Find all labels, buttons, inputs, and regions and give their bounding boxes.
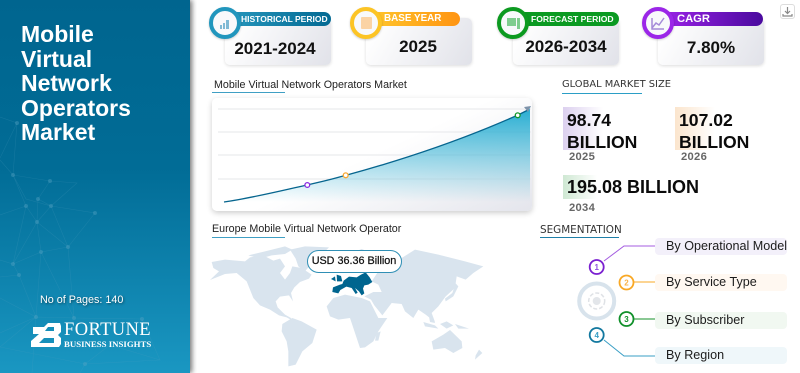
segment: subscriber — [655, 312, 787, 329]
badge 4: 4 — [594, 331, 599, 340]
sidebar title: Market — [21, 119, 95, 145]
callout: USD 36.36 Billion — [306, 250, 402, 273]
forecast icon — [497, 7, 529, 39]
sidebar title: Virtual — [21, 46, 92, 72]
value: 98.74 — [567, 110, 611, 130]
tint — [563, 175, 597, 199]
row background — [655, 312, 787, 329]
Greenland — [290, 246, 329, 271]
base year card — [366, 18, 472, 65]
badge 2: 2 — [624, 278, 629, 288]
row label: By Subscriber — [666, 313, 744, 327]
North America — [210, 255, 312, 321]
heading: Europe map: Europe Mobile Virtual Network Operator — [212, 223, 401, 235]
segmentation diagram — [577, 246, 655, 356]
stat: forecast period — [496, 7, 620, 67]
Europe highlight — [331, 272, 372, 295]
badge 3: 3 — [624, 315, 629, 324]
stat: CAGR — [641, 7, 765, 67]
value: BILLION — [679, 132, 749, 152]
segment: operational model — [655, 238, 787, 255]
base year value: 2025 — [399, 37, 437, 56]
forecast pill: FORECAST PERIOD — [531, 14, 614, 24]
marker 2025 — [305, 183, 310, 187]
heading: market chart: Mobile Virtual Network Operators Market — [214, 79, 407, 91]
base year icon — [350, 7, 382, 39]
forecast value: 2026-2034 — [525, 37, 607, 56]
stat: historical period — [208, 7, 332, 67]
Iceland — [320, 268, 328, 272]
value — [567, 110, 637, 152]
year: 2025 — [569, 151, 595, 163]
network pattern — [0, 117, 160, 373]
CAGR card — [658, 18, 764, 65]
Arctic islands — [248, 246, 292, 259]
value: BILLION — [567, 132, 637, 152]
segment: service type — [655, 274, 787, 291]
row background — [655, 347, 787, 364]
panel: market growth chart — [212, 98, 532, 211]
connectors — [604, 246, 655, 356]
center hub icon — [579, 284, 614, 318]
tint — [563, 107, 603, 150]
marker 2026 — [343, 173, 348, 178]
heading: segmentation: SEGMENTATION — [540, 224, 622, 236]
base year pill — [372, 12, 460, 26]
marker 2034 — [515, 113, 520, 118]
stat: 2026 market size — [675, 107, 749, 163]
Africa — [327, 295, 387, 348]
badge 2 — [620, 276, 634, 290]
forecast card — [513, 18, 619, 65]
logo: Fortune Business Insights — [31, 320, 151, 349]
badge 4 — [590, 328, 604, 342]
callout: USD 36.36 Billion: USD 36.36 Billion — [312, 255, 396, 267]
logo wordmark: FORTUNE — [64, 320, 151, 340]
tint — [675, 107, 715, 150]
row label: By Operational Model — [666, 239, 787, 253]
segment: region — [655, 347, 787, 364]
historical icon — [209, 7, 241, 39]
sidebar title: Operators — [21, 94, 131, 120]
world map — [210, 246, 483, 366]
stat: base year — [349, 7, 473, 67]
row label: By Service Type — [666, 275, 757, 289]
value: 195.08 BILLION — [567, 177, 699, 197]
stat: 2034 market size — [563, 175, 699, 214]
sidebar title: Mobile — [21, 21, 94, 47]
badge 3 — [620, 312, 634, 326]
CAGR pill — [664, 12, 763, 26]
base year pill: BASE YEAR — [384, 13, 441, 24]
Asia — [364, 250, 483, 322]
page count: No of Pages: 140 — [40, 294, 123, 306]
CAGR icon — [642, 7, 674, 39]
sidebar title: Network — [21, 70, 112, 96]
historical card — [224, 18, 330, 65]
badge 1 — [590, 260, 604, 274]
row background — [655, 238, 787, 255]
New Zealand — [475, 350, 482, 360]
Islands — [423, 316, 469, 329]
sidebar panel — [0, 0, 190, 373]
logo mark — [31, 323, 61, 347]
area line chart — [218, 106, 531, 203]
row label: By Region — [666, 348, 724, 362]
year: 2034 — [569, 202, 595, 214]
South America — [282, 318, 317, 366]
sidebar title — [21, 21, 131, 145]
historical pill: HISTORICAL PERIOD — [241, 14, 328, 24]
row background — [655, 274, 787, 291]
Scandinavia — [352, 249, 372, 261]
value — [679, 110, 749, 152]
badge 1: 1 — [594, 263, 599, 272]
forecast pill — [519, 12, 619, 26]
CAGR pill: CAGR — [677, 13, 710, 25]
stat: 2025 market size — [563, 107, 637, 163]
Madagascar — [375, 331, 381, 341]
year: 2026 — [681, 151, 707, 163]
historical pill — [230, 12, 331, 26]
heading: global market size: GLOBAL MARKET SIZE — [562, 79, 671, 90]
logo tagline: BUSINESS INSIGHTS — [64, 339, 151, 349]
CAGR value: 7.80% — [687, 38, 735, 57]
Australia — [432, 330, 462, 353]
Japan — [445, 283, 458, 301]
historical value: 2021-2024 — [234, 39, 316, 58]
value: 107.02 — [679, 110, 733, 130]
icon: download button — [780, 4, 795, 19]
